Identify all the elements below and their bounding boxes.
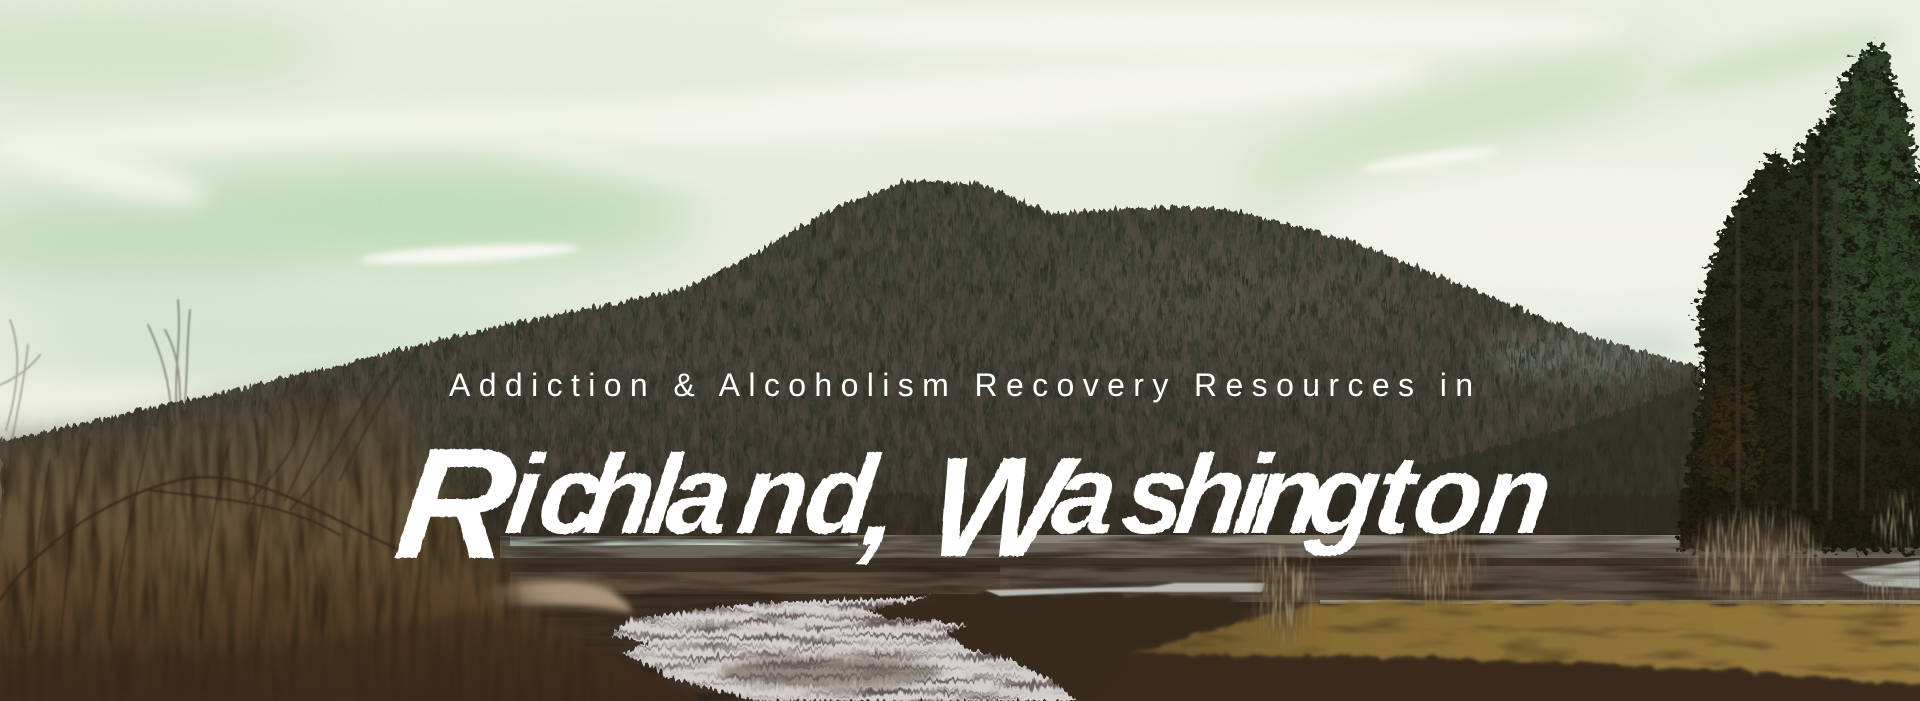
brush twigs — [0, 300, 420, 640]
forested mountain — [0, 178, 1704, 535]
river — [600, 583, 1265, 701]
title: n — [1474, 431, 1560, 557]
title: t — [1368, 431, 1427, 557]
title: a — [1046, 431, 1126, 557]
dark mud bank by river — [870, 592, 1240, 701]
title: c — [532, 431, 612, 557]
title: s — [1116, 431, 1196, 557]
title: R — [387, 415, 526, 592]
title: n — [732, 431, 818, 557]
shrubs on the mud flat — [1259, 496, 1920, 638]
pine trees on the right — [1670, 40, 1920, 560]
title: a — [660, 431, 740, 557]
title: g — [1301, 431, 1388, 557]
title: h — [1168, 431, 1254, 557]
title: l — [638, 431, 689, 557]
title: i — [1228, 431, 1279, 557]
title: o — [1406, 431, 1492, 557]
title: d — [798, 431, 886, 557]
title: h — [578, 431, 664, 557]
left bank with mound — [0, 581, 700, 701]
sky with green tint and white clouds — [0, 0, 1920, 560]
subtitle: Addiction & Alcoholism Recovery Resources in — [449, 367, 1473, 403]
title — [387, 415, 1562, 592]
title: W — [920, 429, 1086, 587]
title: n — [1246, 431, 1332, 557]
lake and mud flats — [0, 534, 1920, 701]
foreground right golden grass — [1040, 602, 1920, 701]
dry brush on the left — [0, 300, 700, 701]
title: , — [854, 432, 910, 572]
title: i — [500, 431, 551, 557]
